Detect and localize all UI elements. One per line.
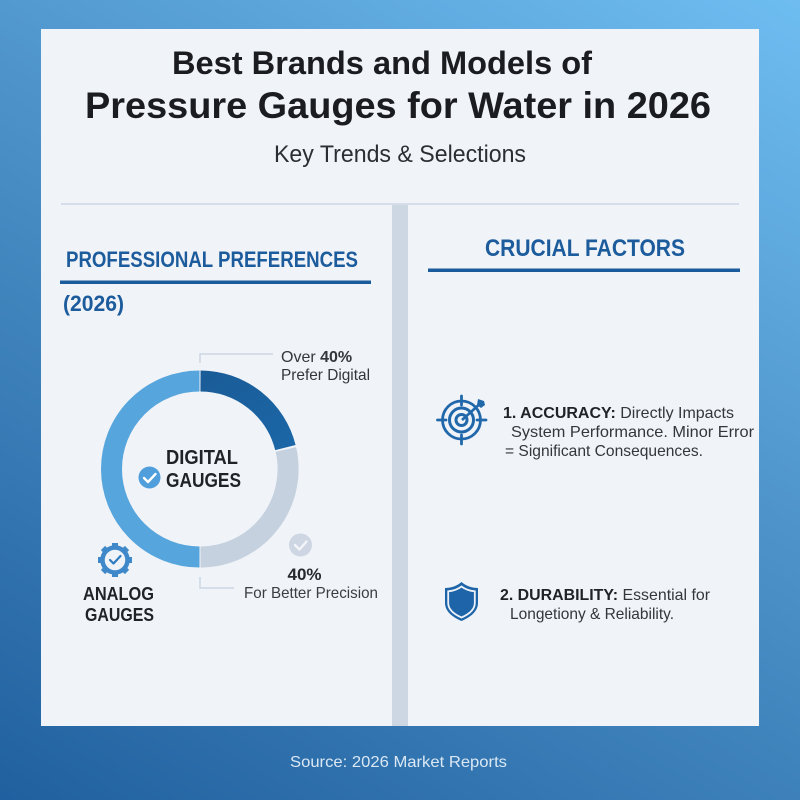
year label: (2026) — [63, 291, 124, 316]
subtitle: Key Trends & Selections — [274, 141, 526, 168]
label: analog gauges: ANALOG — [83, 584, 154, 604]
segment: over 40% digital — [200, 381, 285, 448]
text: accuracy: = Significant Consequences. — [505, 443, 703, 460]
center label: digital gauges: DIGITAL — [166, 447, 238, 469]
column divider — [392, 205, 408, 726]
icon: grey check — [289, 534, 312, 556]
label: analog gauges: GAUGES — [85, 605, 154, 625]
donut chart — [112, 381, 288, 557]
text: accuracy — [503, 405, 755, 460]
leader line: top — [200, 354, 273, 363]
segment: analog gauges — [112, 381, 200, 557]
callout: 40%: 40% — [287, 565, 322, 584]
panel: professional preferences — [60, 247, 378, 625]
icon: shield — [445, 582, 478, 621]
panel: crucial factors — [428, 235, 755, 623]
callout: for better precision: For Better Precision — [244, 585, 378, 602]
center label: digital gauges: GAUGES — [166, 470, 241, 492]
heading: crucial factors: CRUCIAL FACTORS — [485, 235, 685, 262]
text: durability — [500, 587, 711, 623]
segment: 40% precision — [200, 450, 288, 557]
icon: gear with check — [98, 543, 132, 577]
text: accuracy: 1. ACCURACY: Directly Impacts — [503, 405, 734, 422]
text: durability: 2. DURABILITY: Essential for — [500, 587, 711, 604]
leader line: bottom — [200, 577, 234, 588]
callout: prefer digital: Prefer Digital — [281, 367, 370, 384]
label: analog gauges — [83, 584, 154, 625]
heading: title line one: Best Brands and Models of — [172, 45, 592, 81]
heading: title line two: Pressure Gauges for Water in 2026 — [85, 85, 711, 126]
source note: Source: 2026 Market Reports — [290, 754, 507, 771]
text: accuracy: System Performance. Minor Error — [511, 424, 755, 441]
text: durability: Longetiony & Reliability. — [510, 606, 674, 623]
icon: check badge — [138, 466, 160, 488]
heading: professional preferences: PROFESSIONAL PREFERENCES — [66, 247, 358, 272]
icon: target — [438, 396, 486, 444]
center label: digital gauges — [166, 447, 241, 492]
panel: main card — [41, 29, 759, 726]
callout: over 40%: Over 40% — [281, 349, 352, 366]
